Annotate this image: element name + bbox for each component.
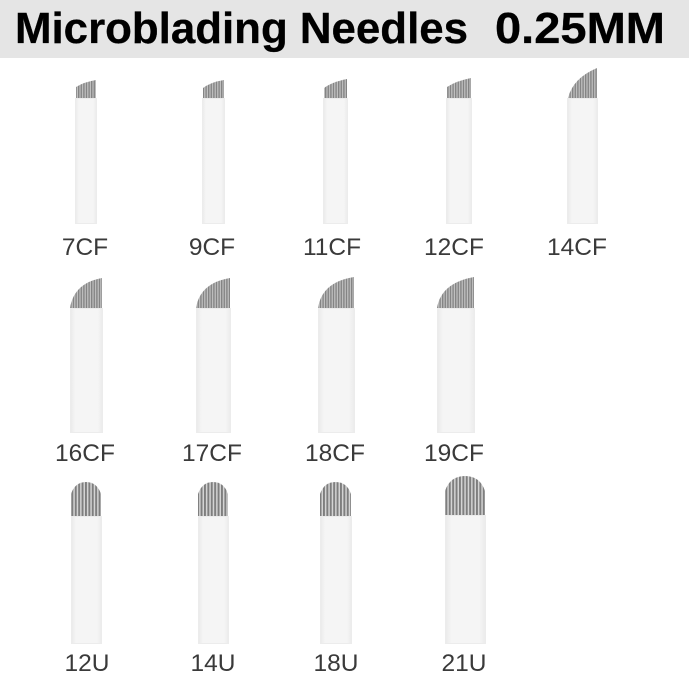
blade: 11CF	[303, 79, 361, 261]
title banner: 0.25MM	[495, 4, 665, 53]
blade: 14CF: 14CF	[547, 234, 607, 261]
blade: 18U: 18U	[314, 650, 358, 677]
title banner	[0, 0, 689, 58]
blade: 14CF	[547, 68, 607, 261]
blade: 18CF	[305, 277, 365, 467]
blade: 17CF	[182, 278, 242, 467]
blade: 14U	[191, 482, 235, 677]
blade: 7CF	[62, 80, 108, 261]
blade: 18U	[314, 482, 358, 677]
blade: 21U	[442, 476, 486, 677]
blade: 12CF	[424, 78, 484, 261]
blade: 21U: 21U	[442, 650, 486, 677]
blade: 17CF: 17CF	[182, 440, 242, 467]
blade: 12U: 12U	[65, 650, 109, 677]
blade: 14U: 14U	[191, 650, 235, 677]
blade: 7CF: 7CF	[62, 234, 108, 261]
title banner: Microblading Needles	[15, 4, 468, 53]
blade: 11CF: 11CF	[303, 234, 361, 261]
blade: 18CF: 18CF	[305, 440, 365, 467]
blade: 16CF	[55, 278, 115, 467]
blade: 9CF	[189, 80, 235, 261]
blade: 19CF: 19CF	[424, 440, 484, 467]
blade: 12U	[65, 482, 109, 677]
blade: 16CF: 16CF	[55, 440, 115, 467]
blade: 9CF: 9CF	[189, 234, 235, 261]
blade: 19CF	[424, 277, 484, 467]
blade: 12CF: 12CF	[424, 234, 484, 261]
